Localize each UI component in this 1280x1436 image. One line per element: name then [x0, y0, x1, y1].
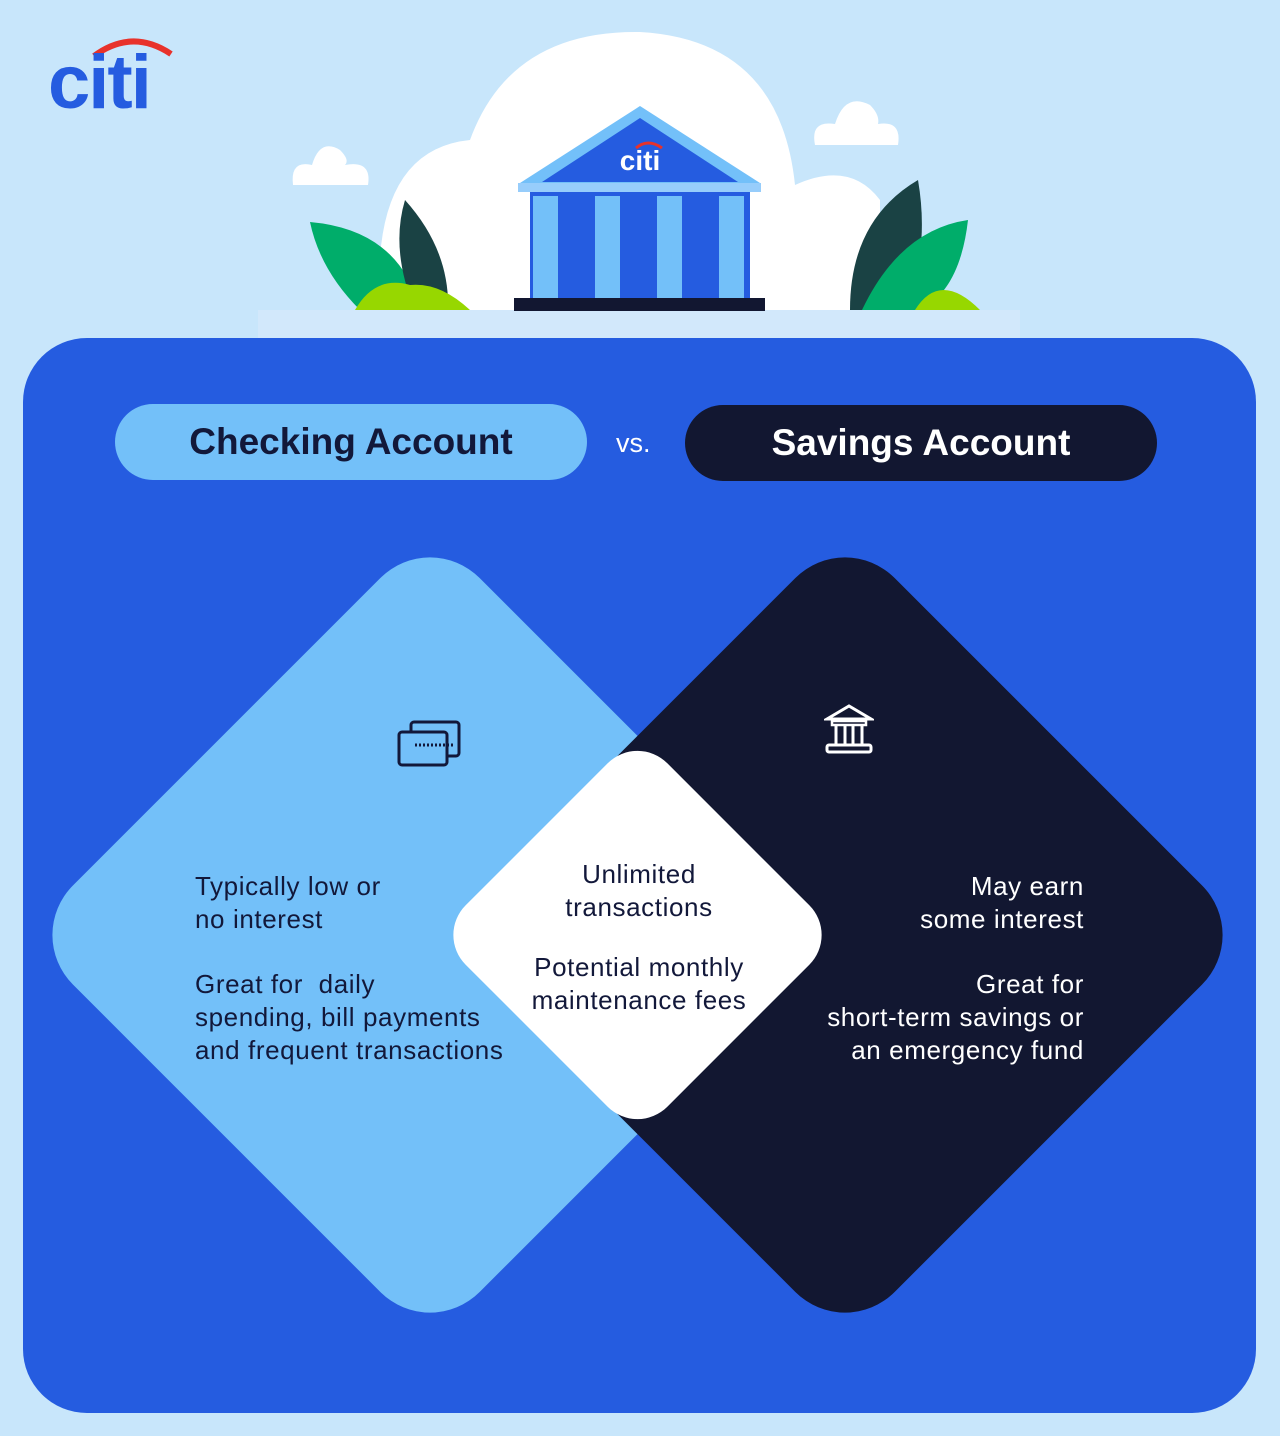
- text: savings features: [827, 871, 1084, 1065]
- illustration: bank with clouds and leaves: [258, 32, 1020, 338]
- header: savings account pill: Savings Account: [772, 422, 1070, 463]
- venn diamonds: [52, 557, 1223, 1313]
- icon: credit cards: [398, 720, 460, 766]
- header: savings account pill: [685, 405, 1157, 481]
- header: checking account pill: Checking Account: [189, 421, 513, 462]
- text: checking features: [195, 871, 503, 1065]
- illustration: bank with clouds and leaves: citi: [620, 145, 660, 176]
- text: savings features: an emergency fund: [851, 1035, 1084, 1065]
- vs label: vs.: [616, 428, 651, 458]
- text: shared features: [532, 859, 746, 1015]
- text: checking features: and frequent transactions: [195, 1035, 503, 1065]
- text: shared features: transactions Potential monthly: [534, 892, 744, 982]
- text: shared features: Unlimited: [582, 859, 696, 889]
- icon: bank: [824, 704, 874, 754]
- text: checking features: spending, bill payments: [195, 1002, 481, 1032]
- header: checking account pill: [115, 404, 587, 480]
- text: savings features: May earn: [971, 871, 1084, 901]
- text: shared features: maintenance fees: [532, 985, 746, 1015]
- text: checking features: Typically low or: [195, 871, 381, 901]
- text: savings features: some interest Great for: [920, 904, 1084, 999]
- text: savings features: short-term savings or: [827, 1002, 1084, 1032]
- text: checking features: no interest Great for daily: [195, 904, 375, 999]
- main panel: [23, 338, 1256, 1413]
